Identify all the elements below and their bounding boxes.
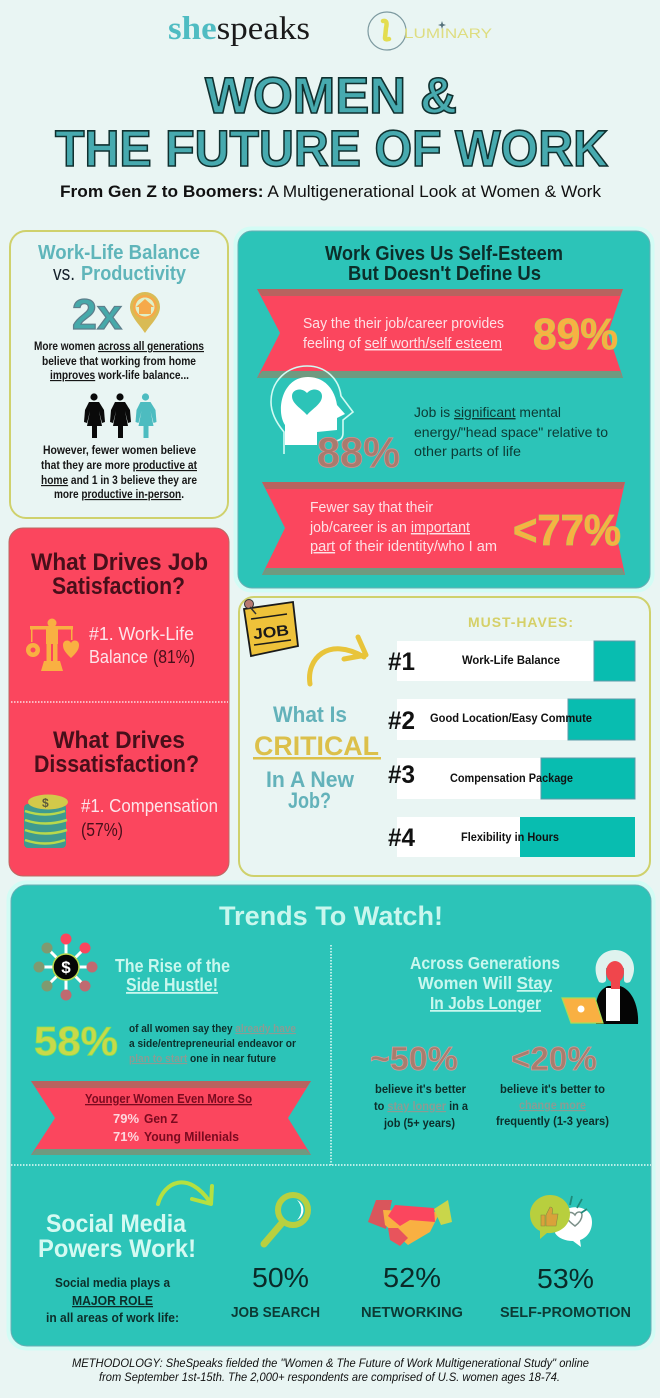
bar: good location [388,699,635,740]
text: work from home improves balance: More women across all generations [34,341,204,353]
text: side endeavor: a side/entrepreneurial endeavor or [129,1038,297,1050]
text: younger women stats: Young Millenials [144,1129,239,1144]
text: compensation 57%: (57%) [81,820,123,840]
text: mental energy: other parts of life [414,443,521,459]
panel: critical in a new job [239,597,650,876]
stats: social media [231,1262,631,1321]
text: fewer believe more productive at home: home and 1 in 3 believe they are [41,475,197,487]
text: major role: in all areas of work life: [46,1311,179,1325]
text: identity: part of their identity/who I am [310,539,497,555]
heading: dissatisfaction [34,727,199,778]
logo: Luminary [368,12,493,50]
panel: trends to watch [11,885,651,1346]
bar: flexibility [388,817,635,857]
methodology note [72,1357,589,1384]
heading: job satisfaction [31,549,208,600]
heading: side hustle: The Rise of the [115,956,230,976]
text: fewer believe more productive at home [41,445,197,501]
bar: good location: #2 [388,707,415,735]
text: side endeavor [129,1023,297,1065]
heading: work-life balance: Productivity [81,263,187,285]
text: work from home improves balance: believe that working from home [42,356,196,368]
text: major role: MAJOR ROLE [72,1294,153,1308]
text: fewer believe more productive at home: that they are more productive at [41,460,197,472]
ribbon: 89% self worth [257,289,623,378]
bar: work-life balance [388,641,635,681]
text: mental energy: energy/"head space" relative to [414,424,608,440]
text: self worth [303,316,504,352]
heading: self-esteem [325,243,563,285]
stat: 88%: 88% [317,429,400,477]
text: younger women stats: Younger Women Even More So [85,1091,252,1106]
heading: what is critical [253,702,381,813]
heading: trends to watch: Trends To Watch! [219,901,443,931]
stat: 2x: 2x [72,291,122,339]
text: work-life balance 81%: Balance [89,647,148,667]
text: compensation 57%: #1. Compensation [81,796,218,816]
text: work-life balance 81% [89,624,195,667]
icon: balance scale [26,618,79,671]
text: mental energy [414,404,608,459]
text: identity: job/career is an important [309,520,470,536]
text: stay longer [374,1082,468,1130]
heading: side hustle: Side Hustle! [126,975,218,995]
title: THE FUTURE OF WORK [55,120,608,177]
text: compensation 57% [81,796,218,840]
text: work-life balance 81%: #1. Work-Life [89,624,194,644]
heading: what is critical: CRITICAL [254,731,379,761]
heading: must-haves: MUST-HAVES: [468,614,573,630]
heading: job satisfaction: Satisfaction? [52,573,185,600]
heading: what is critical: What Is [273,702,347,727]
heading: dissatisfaction: Dissatisfaction? [34,751,199,778]
text: identity: Fewer say that their [310,500,433,516]
icon: coin stack: $ [42,796,49,810]
text: side endeavor: plan to start one in near future [129,1053,276,1065]
heading: stay in jobs longer: Women Will Stay [418,973,552,993]
bar: compensation: Compensation Package [450,771,573,785]
arrow: to must-haves [310,637,366,684]
text: self worth: feeling of self worth/self esteem [303,336,502,352]
text: major role: Social media plays a [55,1276,171,1290]
bar: compensation: #3 [388,761,415,789]
text: fewer believe more productive at home: However, fewer women believe [43,445,196,457]
stat: 89%: 89% [533,310,618,359]
text: major role [46,1276,179,1325]
bar: flexibility: #4 [388,824,415,852]
bar chart: must-haves [388,641,635,857]
heading: what is critical: In A New [266,767,355,792]
text: fewer believe more productive at home: more productive in-person. [54,489,184,501]
text: side endeavor: of all women say they already have [129,1023,296,1035]
text: identity [309,500,497,555]
text: work-life balance 81%: (81%) [153,647,195,667]
ribbon: 77% identity [262,482,625,575]
icon: dollar hub: $ [61,958,71,977]
stats: social media: 52% [383,1262,441,1293]
heading: stay in jobs longer [410,953,560,1013]
heading: social media powers work: Powers Work! [38,1235,196,1263]
stats: social media: 53% [537,1263,594,1294]
heading: work-life balance: Work-Life Balance [38,242,200,264]
icon: woman with laptop [562,950,638,1024]
bar: compensation [388,758,635,799]
stats: social media: SELF-PROMOTION [500,1304,631,1321]
stats: social media: JOB SEARCH [231,1304,320,1321]
icon: job note: JOB [252,622,290,643]
stat: about 50%: ~50% [370,1040,458,1077]
text: younger women stats: Gen Z [144,1111,178,1126]
panel: job satisfaction drivers [9,528,229,876]
logo: SheSpeaks: shespeaks [168,11,310,47]
heading: job satisfaction: What Drives Job [31,549,208,576]
text: stay longer: to stay longer in a [374,1099,468,1113]
heading: self-esteem: But Doesn't Define Us [348,263,541,285]
text: younger women stats [85,1091,252,1144]
heading: stay in jobs longer: Across Generations [410,953,560,973]
icon: speech bubbles [530,1195,592,1247]
stats: social media: 50% [252,1262,309,1293]
bar: work-life balance: Work-Life Balance [462,653,560,667]
text: younger women stats: 79% [113,1111,139,1126]
text: work from home improves balance: improves work-life balance... [50,370,189,382]
panel: work gives us self-esteem [238,231,650,588]
heading: self-esteem: Work Gives Us Self-Esteem [325,243,563,265]
title: WOMEN & [205,67,457,124]
methodology note: from September 1st-15th. The 2,000+ respondents are comprised of U.S. women ages 18-74. [99,1371,560,1384]
icon: coin stack [24,794,68,848]
heading: social media powers work [38,1210,196,1263]
icon: three women [84,393,156,438]
arrow: to social stats [158,1182,212,1204]
text: younger women stats: 71% [113,1129,139,1144]
icon: job note [244,600,298,656]
text: mental energy: Job is significant mental [414,404,561,420]
icon: home location pin [130,292,160,333]
bar: good location: Good Location/Easy Commute [430,711,592,725]
stat: 58%: 58% [34,1018,118,1064]
heading: stay in jobs longer: In Jobs Longer [430,993,541,1013]
icon: handshake [368,1200,452,1246]
text: change more: frequently (1-3 years) [496,1114,609,1128]
methodology note: METHODOLOGY: SheSpeaks fielded the "Women & The Future of Work Multigenerational Study" online [72,1357,589,1370]
heading: social media powers work: Social Media [46,1210,187,1238]
panel: work-life balance vs productivity [10,231,228,518]
text: stay longer: believe it's better [375,1082,466,1096]
logo: Luminary: LUMINARY [404,25,493,41]
heading: work-life balance [38,242,200,285]
text: change more [496,1082,609,1128]
subtitle: From Gen Z to Boomers: A Multigenerational Look at Women & Work [60,182,601,201]
bar: work-life balance: #1 [388,648,415,676]
icon: dollar hub [34,934,98,1000]
text: self worth: Say the their job/career provides [303,316,504,332]
ribbon: younger women [31,1081,311,1155]
icon: magnifier [264,1195,308,1244]
text: stay longer: job (5+ years) [383,1116,455,1130]
text: change more: believe it's better to [500,1082,605,1096]
heading: side hustle [115,956,230,995]
heading: what is critical: Job? [288,788,331,813]
heading: work-life balance: vs. [53,263,75,285]
text: work from home improves balance [34,341,204,382]
stat: less than 20%: <20% [511,1040,597,1077]
heading: dissatisfaction: What Drives [53,727,185,754]
text: change more: change more [519,1098,586,1112]
stat: less than 77%: <77% [513,506,621,555]
title [55,67,608,177]
icon: head with heart [271,366,353,454]
stats: social media: NETWORKING [361,1304,463,1321]
bar: flexibility: Flexibility in Hours [461,830,559,844]
